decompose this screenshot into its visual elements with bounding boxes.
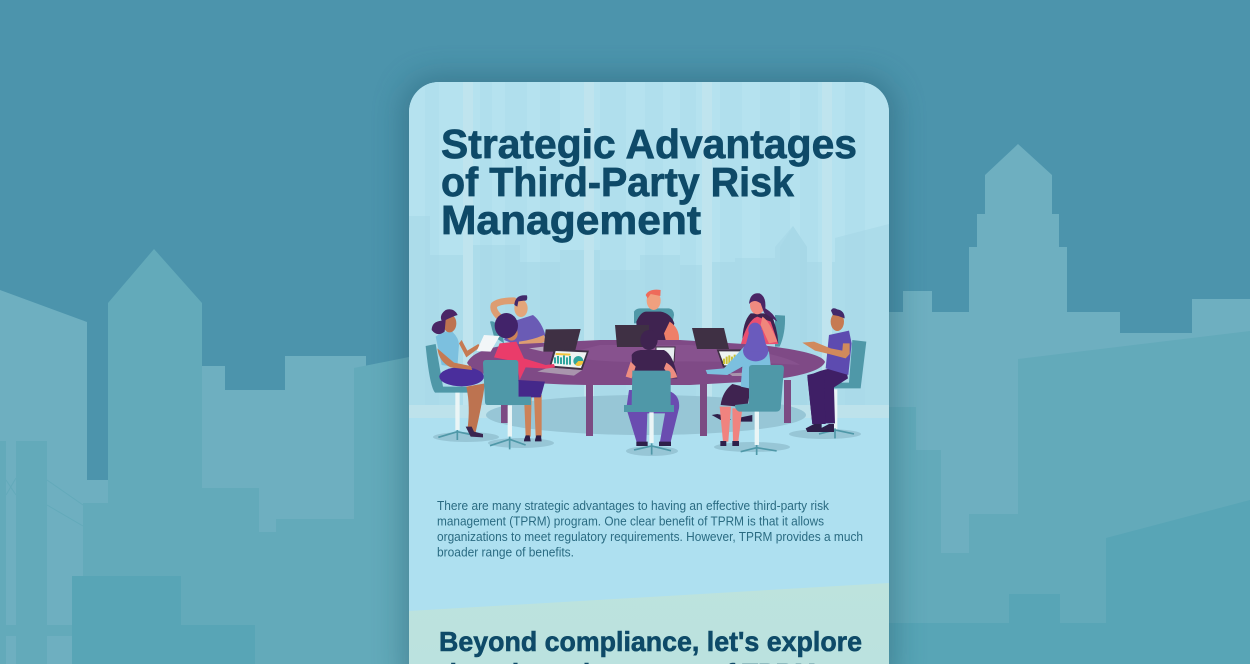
chair bbox=[426, 344, 468, 393]
illustration: meeting around a table bbox=[426, 290, 866, 456]
laptop: front right with chart bbox=[717, 349, 744, 376]
right skyline bbox=[889, 144, 1250, 664]
left skyline bbox=[0, 249, 409, 664]
person: woman with blue hair seen from behind bbox=[706, 323, 784, 455]
table top bbox=[467, 340, 825, 385]
title: of Third-Party Risk bbox=[441, 159, 794, 205]
title: Management bbox=[441, 197, 701, 243]
window wall with blinds and distant skyline bbox=[409, 82, 889, 418]
intro text: broader range of benefits. bbox=[437, 546, 574, 560]
laptop: back centre bbox=[615, 325, 649, 347]
person: man seen from behind bbox=[624, 330, 679, 455]
intro text: management (TPRM) program. One clear benefit of TPRM is that it allows bbox=[437, 514, 824, 528]
title: Strategic Advantages bbox=[441, 121, 857, 167]
laptop: back right bbox=[692, 328, 729, 349]
chair bbox=[624, 371, 674, 412]
person: man with hand behind head bbox=[490, 295, 546, 346]
laptop: back left bbox=[529, 329, 581, 352]
intro text bbox=[437, 499, 863, 560]
floor shadows bbox=[433, 395, 861, 456]
person: man with red hair bbox=[634, 290, 679, 343]
card background bbox=[409, 82, 889, 664]
section heading: Beyond compliance, let's explore bbox=[439, 626, 862, 657]
laptop: small centre bbox=[656, 347, 675, 362]
person: man presenting on right bbox=[802, 308, 866, 438]
panel: card bbox=[409, 82, 889, 664]
intro text: organizations to meet regulatory requirements. However, TPRM provides a much bbox=[437, 530, 863, 544]
title bbox=[441, 121, 857, 243]
intro text: There are many strategic advantages to having an effective third-party risk bbox=[437, 499, 830, 513]
person: woman in red seen from behind bbox=[483, 313, 555, 449]
card shadow bbox=[404, 78, 894, 664]
laptop: front left with chart bbox=[537, 349, 589, 376]
chair bbox=[735, 365, 784, 412]
person: woman in pink behind table bbox=[712, 293, 785, 422]
table legs bbox=[501, 380, 791, 436]
chair bbox=[483, 360, 531, 405]
section heading bbox=[440, 630, 862, 664]
person: woman with tablet bbox=[426, 309, 500, 440]
green section band bbox=[409, 583, 889, 664]
